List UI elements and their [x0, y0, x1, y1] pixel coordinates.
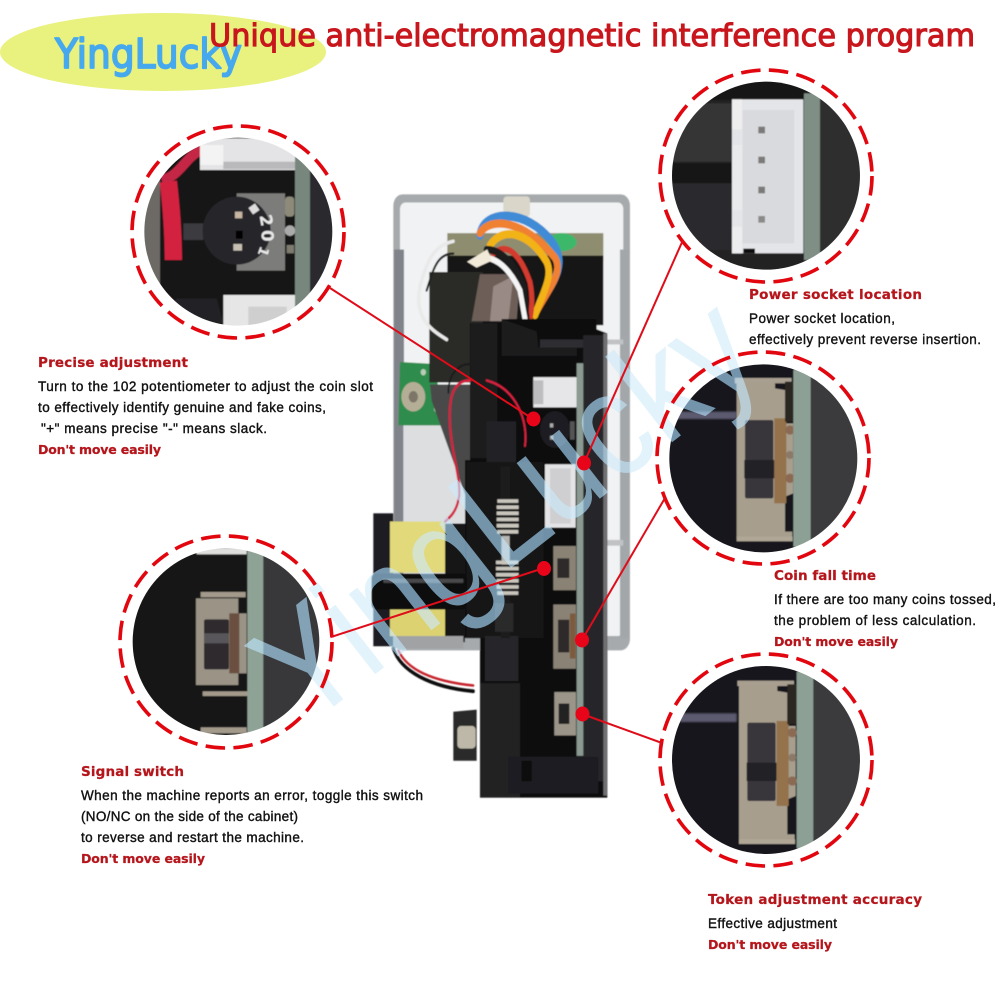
watermark: YingLucky	[221, 262, 786, 754]
title: Unique anti-electromagnetic interference program	[209, 18, 975, 54]
rear mechanism	[429, 233, 603, 499]
text block: Precise adjustment: Turn to the 102 potentiometer to adjust the coin slot	[38, 379, 373, 394]
product photo: coin selector side view	[372, 194, 630, 798]
text block: Signal switch	[81, 764, 423, 866]
text block: Signal switch: Signal switch	[81, 764, 184, 780]
main black housing	[465, 319, 607, 798]
watermark: YingLucky	[221, 262, 786, 754]
text block: Coin fall time: the problem of less calculation.	[774, 613, 976, 628]
text block: Token adjustment accuracy	[708, 892, 922, 952]
detail circle: potentiometer: 0	[258, 230, 277, 242]
text block: Precise adjustment: to effectively identify genuine and fake coins,	[38, 400, 326, 415]
solenoid coil	[372, 513, 467, 648]
detail ring: coin fall time switch	[657, 352, 869, 564]
detail circle: token adjustment switch	[672, 666, 860, 854]
text block: Coin fall time	[774, 568, 996, 649]
text block: Signal switch: Don't move easily	[81, 851, 205, 866]
lower white connector	[545, 464, 576, 528]
potentiometer	[540, 411, 575, 448]
marker dots	[526, 412, 591, 722]
detail circle: potentiometer: 1	[254, 244, 271, 258]
text block: Signal switch: to reverse and restart the machine.	[81, 830, 304, 845]
slide switches	[553, 546, 576, 735]
leader lines	[330, 240, 683, 743]
red wires	[393, 364, 526, 691]
wire bundle	[419, 216, 559, 340]
text block: Coin fall time: Coin fall time	[774, 568, 876, 584]
back plate	[393, 194, 630, 650]
text block: Signal switch: (NO/NC on the side of the cabinet)	[81, 809, 298, 824]
springs	[495, 466, 519, 638]
lower coil	[453, 710, 477, 761]
text block: Precise adjustment	[38, 355, 373, 457]
detail ring: potentiometer	[132, 126, 344, 338]
detail circle: potentiometer	[144, 138, 332, 326]
logo: YingLucky	[0, 13, 326, 91]
detail ring: signal switch	[120, 536, 332, 748]
text block: Signal switch: When the machine reports an error, toggle this switch	[81, 788, 423, 803]
text block: Power socket location: effectively prevent reverse insertion.	[749, 332, 981, 347]
text block: Coin fall time: If there are too many coins tossed,	[774, 592, 996, 607]
text block: Token adjustment accuracy: Don't move easily	[708, 937, 832, 952]
green circuit board tab	[398, 362, 443, 425]
text block: Power socket location	[749, 287, 981, 347]
text block: Token adjustment accuracy: Token adjustment accuracy	[708, 892, 922, 908]
detail circle: coin fall time switch	[669, 364, 858, 552]
text block: Precise adjustment: "+" means precise "-" means slack.	[41, 421, 267, 436]
text block: Coin fall time: Don't move easily	[774, 634, 898, 649]
text block: Token adjustment accuracy: Effective adjustment	[708, 916, 837, 931]
text block: Power socket location: Power socket location,	[749, 311, 895, 326]
logo: YingLucky: YingLucky	[54, 30, 242, 78]
detail circle: potentiometer: 2	[256, 213, 276, 228]
text block: Power socket location: Power socket location	[749, 287, 922, 303]
text block: Precise adjustment: Precise adjustment	[38, 355, 189, 371]
circuit board edge	[577, 363, 583, 756]
detail ring: token adjustment switch	[660, 654, 872, 866]
top white connector	[533, 377, 577, 407]
detail circle: signal switch	[132, 548, 320, 735]
detail circle: power socket	[672, 82, 860, 270]
text block: Precise adjustment: Don't move easily	[38, 442, 161, 457]
detail ring: power socket	[660, 70, 872, 282]
